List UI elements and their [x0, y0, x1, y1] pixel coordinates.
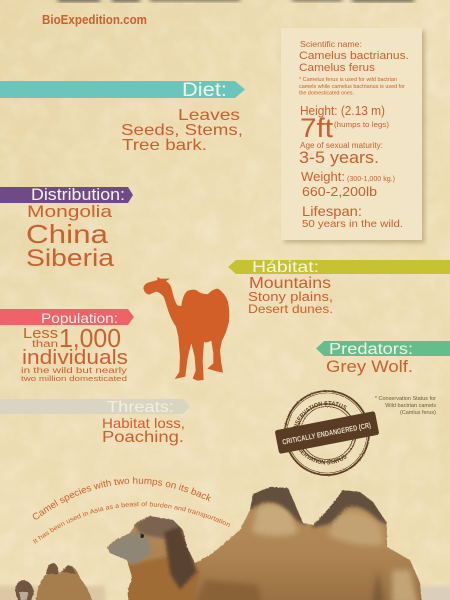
- threats list: Habitat loss,: [102, 415, 185, 431]
- conservation status stamp: [275, 390, 379, 476]
- habitat heading: Hábitat:: [252, 259, 319, 276]
- lifespan: 50 years in the wild.: [302, 219, 403, 230]
- population figures: 1,000: [59, 323, 121, 353]
- diet list: Seeds, Stems,: [121, 122, 243, 139]
- scientific name note: [299, 77, 405, 96]
- population figures: two million domesticated: [21, 374, 127, 383]
- population figures: [21, 323, 128, 383]
- curved caption: [32, 476, 230, 544]
- scientific name: [299, 40, 409, 74]
- height: (humps to legs): [334, 122, 389, 129]
- distribution list: [26, 202, 115, 272]
- weight: 660-2,200lb: [302, 184, 377, 199]
- diet list: Leaves: [178, 107, 240, 124]
- population heading: Population:: [41, 310, 118, 326]
- weight: [301, 169, 395, 199]
- main camel: [100, 480, 430, 600]
- threats list: [102, 415, 185, 446]
- height: 7ft: [300, 113, 334, 143]
- conservation note: * Conservation Status for: [375, 396, 436, 402]
- distribution heading: Distribution:: [31, 185, 125, 204]
- diet list: Tree bark.: [122, 137, 207, 154]
- panel: facts card: [281, 28, 425, 243]
- conservation status stamp: CONSERVATION STATUS: [298, 450, 346, 464]
- panel: habitat: [228, 259, 450, 316]
- icon: camel silhouette: [143, 277, 229, 381]
- scientific name note: camels while camelus bactrianus is used for: [299, 84, 405, 90]
- scientific name: Camelus bactrianus.: [299, 50, 409, 62]
- panel: population: [0, 309, 134, 383]
- population figures: in the wild but nearly: [21, 365, 128, 375]
- distribution banner: [0, 187, 133, 203]
- sexual maturity: [299, 141, 383, 167]
- sexual maturity: Age of sexual maturity:: [300, 141, 383, 150]
- ground horizon: [0, 586, 450, 600]
- lifespan: [302, 203, 403, 230]
- panel: diet: [0, 80, 245, 154]
- weight: (300-1,000 kg.): [347, 176, 395, 183]
- curved caption: Camel species with two humps on its back: [32, 476, 212, 520]
- distribution list: Siberia: [26, 245, 115, 272]
- habitat banner: [228, 260, 450, 274]
- cropped title remnant: [58, 0, 414, 2]
- curved caption: It has been used in Asia as a beast of burden and transportation: [32, 502, 230, 544]
- predators banner: [316, 341, 450, 356]
- conservation status stamp: CRITICALLY ENDANGERED (CR): [281, 420, 372, 447]
- predators value: Grey Wolf.: [326, 357, 413, 376]
- habitat list: Desert dunes.: [248, 302, 333, 316]
- threats banner: [0, 399, 190, 414]
- panel: distribution: [0, 185, 133, 272]
- conservation note: (Camlus ferus): [400, 410, 436, 416]
- conservation note: Wild bactrian camels: [385, 403, 436, 409]
- lifespan: Lifespan:: [302, 203, 362, 219]
- scientific name note: the domesticated ones.: [299, 90, 354, 96]
- panel: threats: [0, 399, 190, 446]
- scientific name note: * Camelus ferus is used for wild bactrian: [299, 77, 397, 83]
- small camel: [15, 563, 93, 600]
- threats heading: Threats:: [107, 399, 174, 416]
- sexual maturity: 3-5 years.: [299, 148, 379, 167]
- population banner: [0, 309, 134, 325]
- conservation status stamp: CONSERVATION STATUS: [293, 401, 347, 427]
- population figures: individuals: [22, 347, 128, 369]
- threats list: Poaching.: [102, 429, 184, 446]
- scientific name: Camelus ferus: [299, 62, 376, 74]
- diet banner: [0, 81, 245, 98]
- population figures: Less: [23, 325, 58, 342]
- panel: predators: [316, 341, 450, 376]
- site name: BioExpedition.com: [42, 12, 147, 27]
- photo: camels: [0, 480, 450, 600]
- habitat list: Stony plains,: [248, 289, 333, 304]
- conservation note: [375, 396, 436, 416]
- habitat list: Mountains: [249, 275, 331, 292]
- height: [300, 103, 389, 143]
- population figures: than: [32, 339, 58, 350]
- weight: Weight:: [301, 169, 345, 184]
- habitat list: [248, 275, 333, 316]
- distribution list: China: [26, 219, 109, 249]
- predators heading: Predators:: [329, 341, 413, 358]
- height: Height: (2.13 m): [300, 103, 385, 118]
- distribution list: Mongolia: [27, 202, 113, 221]
- scientific name: Scientific name:: [300, 40, 362, 49]
- diet heading: Diet:: [182, 80, 227, 101]
- diet list: [121, 107, 243, 154]
